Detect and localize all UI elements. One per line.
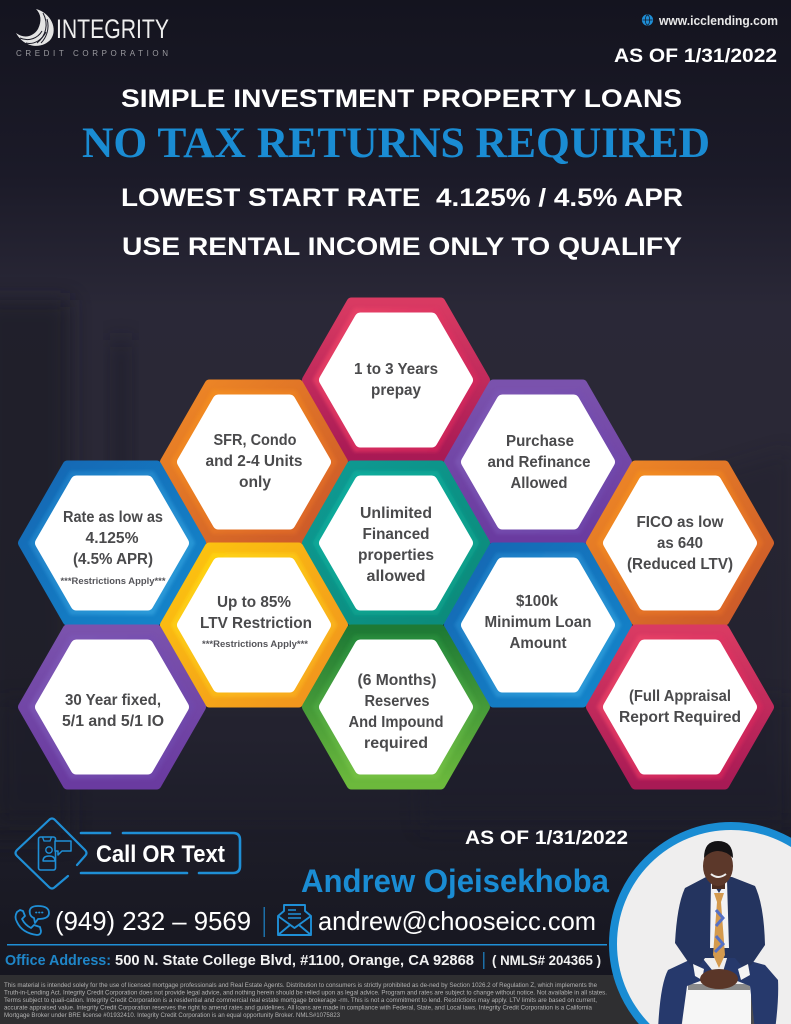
hexagon: reserves: Reserves [364,693,430,710]
nmls number: ( NMLS# 204365 ) [492,953,601,968]
hexagon: property types: SFR, Condo [214,432,297,449]
hexagon: ltv [165,548,343,702]
address text: 500 N. State College Blvd, #1100, Orange, CA 92868 [115,952,474,969]
trousers [658,960,712,1024]
hexagon: rate: 4.125% [86,530,138,547]
hexagon: rate: ***Restrictions Apply*** [60,576,166,587]
email address: andrew@chooseicc.com [318,906,596,936]
logo tagline: CREDIT CORPORATION [16,49,168,58]
icon: phone in diamond [16,818,86,888]
date stamp bottom: AS OF 1/31/2022 [465,828,628,849]
hexagon: rate [23,466,201,620]
heading: simple investment property loans: SIMPLE INVESTMENT PROPERTY LOANS [121,85,682,113]
hexagon: purchase and refinance: Purchase [506,433,574,450]
hexagon: minimum loan: Minimum Loan [484,614,592,631]
hexagon: prepay: 1 to 3 Years [354,361,438,378]
hexagon: property types: and 2-4 Units [206,453,303,470]
hexagon: purchase and refinance: and Refinance [488,454,591,471]
icon: feather swoosh [16,9,54,46]
hexagon: loan terms: 5/1 and 5/1 IO [62,713,164,730]
logo wordmark: INTEGRITY [56,14,169,44]
hexagon: unlimited financed: Financed [362,526,430,543]
hexagon: fico: (Reduced LTV) [627,556,733,573]
hexagon: appraisal [591,630,769,784]
hexagon: loan terms: 30 Year fixed, [65,692,161,709]
hexagon: property types: only [239,474,271,491]
hexagon: ltv: ***Restrictions Apply*** [202,639,308,650]
hexagon: appraisal: (Full Appraisal [629,688,731,705]
hexagon: purchase and refinance: Allowed [510,475,568,492]
hexagon: unlimited financed [307,466,485,620]
hexagon: ltv: LTV Restriction [200,615,312,632]
phone row [16,906,251,936]
hexagon: reserves: (6 Months) [358,672,436,689]
hexagon: reserves: required [364,735,428,752]
title block [82,85,710,261]
hexagon: reserves [307,630,485,784]
disclaimer text: This material is intended solely for the use of licensed mortgage professionals and Real Estate Agents. Distribution to consumers is strictly prohibited as de-ned by Section 1026.2 of Regulation Z, which implements the [4,983,598,989]
badge frame [81,833,240,873]
portrait figure [658,841,778,1024]
hexagon: property types [165,384,343,540]
hexagon: loan terms [23,630,201,784]
neck and head [712,884,725,889]
hexagon: rate: Rate as low as [63,509,163,526]
stool [683,987,755,1024]
hexagon: prepay: prepay [371,382,421,399]
disclaimer text: Truth-in-Lending Act. Integrity Credit Corporation does not provide legal advice, and nothing herein should be relied upon as legal advice. Program and rates are subject to change without notice. Not available in all states. [4,990,607,996]
shirt [710,880,729,948]
heading: lowest start rate: LOWEST START RATE 4.125% / 4.5% APR [121,184,683,212]
hexagon: minimum loan: $100k [516,593,558,610]
hexagon: ltv: Up to 85% [217,594,291,611]
divider phone and email [264,907,265,937]
hexagon: unlimited financed: allowed [366,568,426,585]
office address row [5,952,601,969]
hexagon: appraisal: Report Required [619,709,741,726]
address divider [483,952,484,969]
contact name: Andrew Ojeisekhoba [301,863,609,899]
disclaimer text [4,983,607,1019]
jacket [675,877,765,972]
tie [713,893,725,968]
hexagon: fico: FICO as low [636,514,724,531]
badge label: Call OR Text [96,841,225,868]
date stamp top: AS OF 1/31/2022 [614,46,777,67]
hexagon: fico: as 640 [657,535,703,552]
icon: envelope [278,905,311,935]
icon: phone with speech bubble [16,906,49,935]
portrait ring [613,826,791,1024]
logo [16,9,169,58]
hexagon: purchase and refinance [449,384,627,540]
call or text badge [16,818,240,888]
hexagon: minimum loan [449,548,627,702]
hands [700,969,738,989]
hexagon: rate: (4.5% APR) [73,551,153,568]
hexagon: minimum loan: Amount [510,635,567,652]
hexagon: reserves: And Impound [348,714,444,731]
hexagon: unlimited financed: properties [358,547,434,564]
hexagon: prepay [307,302,485,458]
heading: no tax returns required: NO TAX RETURNS REQUIRED [82,120,710,167]
icon: globe [642,15,652,25]
website link [642,14,778,28]
disclaimer text: accurate appraised value. Integrity Credit Corporation reserves the right to amend rates and guidelines. All loans are made in compliance with Federal, State, and Local laws. Integrity Credit Corporation is a California [4,1006,593,1012]
rule above address [7,944,607,946]
heading: rental income: USE RENTAL INCOME ONLY TO QUALIFY [122,233,682,261]
address label: Office Address: [5,952,111,969]
phone number: (949) 232 – 9569 [55,906,251,936]
website text: www.icclending.com [658,14,778,28]
portrait [613,826,791,1024]
disclaimer text: Terms subject to quali-cation. Integrity Credit Corporation is a residential and commercial real estate mortgage brokerage -rm. This is not a commitment to lend. Restrictions may apply. LTV limits are based on current, [4,998,597,1004]
disclaimer text: Mortgage Broker under BRE license #01932410. Integrity Credit Corporation is an equal opportunity Broker. NMLS#1075823 [4,1013,341,1019]
email row [278,905,596,936]
hexagon: unlimited financed: Unlimited [360,505,432,522]
hexagon: fico [591,466,769,620]
cuffs [693,964,704,980]
disclaimer panel [0,975,791,1024]
